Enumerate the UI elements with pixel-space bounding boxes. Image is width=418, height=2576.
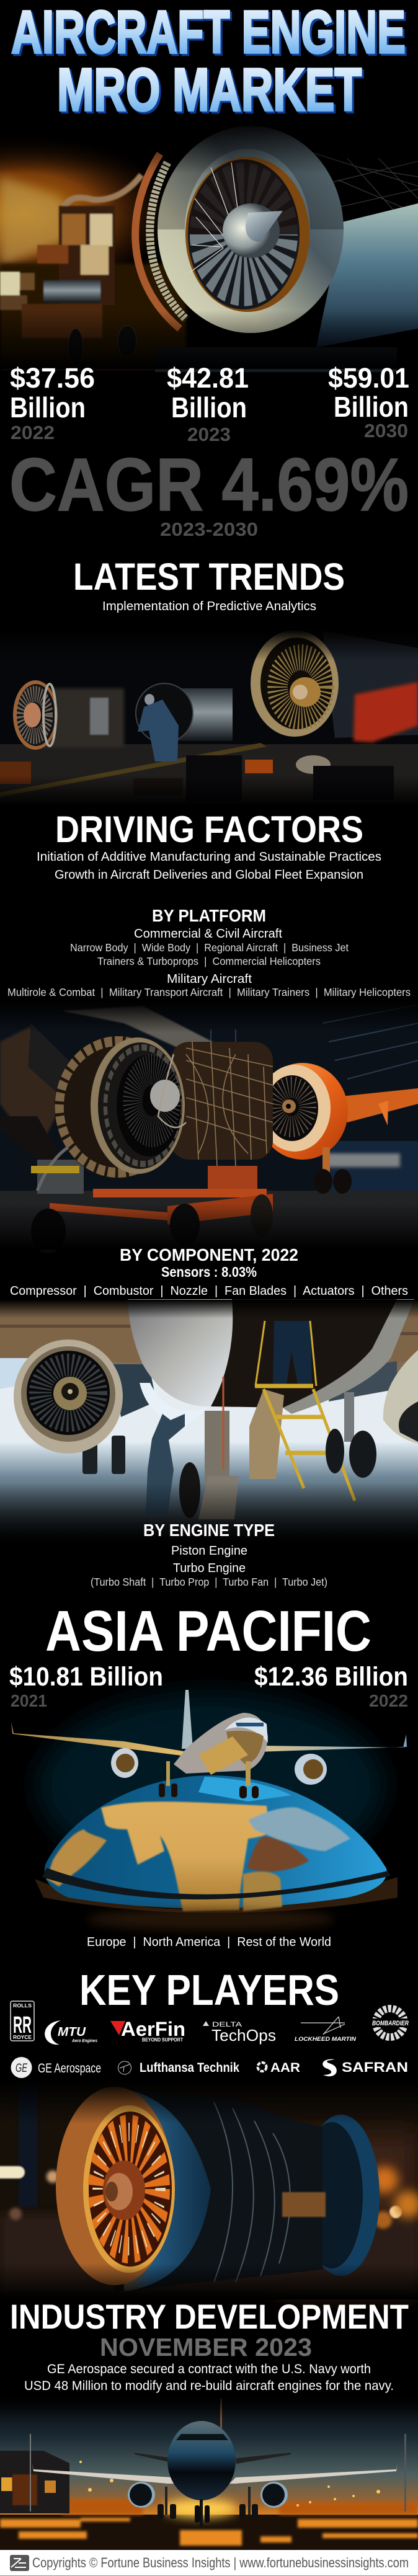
- market value 2023: $42.81: [167, 362, 249, 394]
- footer: [0, 2550, 418, 2576]
- market value 2023: 2023: [187, 424, 231, 445]
- by engine type segment: Turbo Engine: [173, 1561, 246, 1575]
- logo: GE Aerospace: GE Aerospace: [38, 2061, 101, 2076]
- development text: [24, 2362, 394, 2393]
- airplane: [32, 2398, 398, 2527]
- mechanic: [146, 1414, 185, 1516]
- heading: driving factors: DRIVING FACTORS: [55, 809, 363, 850]
- asia pacific values: 2022: [369, 1691, 408, 1710]
- asia pacific values: 2021: [11, 1691, 47, 1710]
- other regions: Europe | North America | Rest of the World: [87, 1935, 331, 1949]
- market value 2022: $37.56: [10, 362, 95, 394]
- CAGR: 2023-2030: [160, 518, 258, 540]
- logo: Delta TechOps: TechOps: [211, 2026, 276, 2045]
- right engine: [251, 630, 418, 742]
- by platform segment: Commercial & Civil Aircraft: [134, 927, 282, 941]
- heading: latest trends: LATEST TRENDS: [73, 556, 345, 598]
- logo: Rolls-Royce: ROLLS: [13, 2003, 32, 2009]
- by platform segment: Military Aircraft: [167, 972, 252, 986]
- logo: Lockheed Martin: [295, 2017, 357, 2043]
- logo: Delta TechOps: [203, 2021, 276, 2045]
- market value 2030: $59.01: [328, 362, 409, 394]
- image: glowing engine with bokeh: [0, 2081, 418, 2299]
- aircraft belly and cowl: [128, 1299, 414, 1426]
- logo: Rolls-Royce: RR: [13, 2012, 32, 2038]
- person on ladder: [273, 1321, 312, 1384]
- logo: Bombardier: BOMBARDIER: [372, 2020, 409, 2027]
- image: engine on stand in hangar: [0, 1002, 418, 1253]
- development text: USD 48 Million to modify and re-build aircraft engines for the navy.: [24, 2379, 394, 2393]
- by component segment: Compressor | Combustor | Nozzle | Fan Blades | Actuators | Others: [10, 1284, 408, 1298]
- title: [11, 0, 407, 125]
- market value 2030: 2030: [364, 420, 408, 442]
- logo: GE Aerospace: [11, 2057, 101, 2078]
- logo: AerFin: AerFin: [121, 2018, 185, 2040]
- by platform segment: Narrow Body | Wide Body | Regional Aircraft | Business Jet: [70, 941, 349, 954]
- driving factors text: Growth in Aircraft Deliveries and Global Fleet Expansion: [55, 868, 363, 882]
- tan cover: [249, 1389, 284, 1479]
- logo: Bombardier: [372, 2009, 409, 2037]
- market value 2030: [328, 362, 409, 442]
- image: engine workshop: [0, 629, 418, 806]
- logo: Safran: SAFRAN: [342, 2059, 408, 2075]
- by engine type segment: [91, 1521, 327, 1588]
- logo: Rolls-Royce: [11, 2001, 34, 2041]
- driving factors text: Initiation of Additive Manufacturing and Sustainable Practices: [37, 850, 381, 864]
- orange engine: [257, 1063, 418, 1194]
- image: globe and airplane: [11, 1690, 407, 1930]
- market value 2022: Billion: [10, 391, 86, 424]
- market value 2023: Billion: [171, 391, 247, 424]
- by component segment: Sensors : 8.03%: [161, 1264, 257, 1280]
- yellow ladder: [255, 1321, 355, 1501]
- asia pacific values: [9, 1662, 408, 1710]
- terminal building: [0, 2434, 406, 2513]
- logo: MTU: MTU: [58, 2025, 86, 2039]
- market value 2022: [10, 362, 95, 443]
- by engine type segment: Piston Engine: [171, 1544, 247, 1558]
- engine: [56, 2087, 380, 2291]
- footer logo: [10, 2555, 29, 2571]
- heading: key players: KEY PLAYERS: [79, 1966, 339, 2014]
- logo: Lockheed Martin: LOCKHEED MARTIN: [295, 2036, 357, 2043]
- by engine type segment: BY ENGINE TYPE: [143, 1521, 275, 1540]
- image: technicians under aircraft: [0, 1299, 418, 1544]
- logo: Rolls-Royce: ROYCE: [13, 2035, 32, 2040]
- logo: GE Aerospace: GE: [16, 2062, 27, 2075]
- image: airplane on wet runway at dusk: [0, 2394, 418, 2550]
- by platform segment: [7, 906, 411, 998]
- logo: MTU: [45, 2020, 97, 2045]
- worker: [138, 694, 179, 762]
- by component segment: BY COMPONENT, 2022: [120, 1245, 298, 1264]
- by engine type segment: (Turbo Shaft | Turbo Prop | Turbo Fan | Turbo Jet): [91, 1576, 327, 1588]
- logo: Lufthansa Technik: Lufthansa Technik: [140, 2061, 239, 2075]
- left engine: [14, 1339, 125, 1474]
- by platform segment: Trainers & Turboprops | Commercial Helicopters: [97, 955, 321, 967]
- bokeh lights: [0, 2166, 418, 2229]
- development date: NOVEMBER 2023: [100, 2333, 312, 2361]
- logo: AAR: AAR: [270, 2061, 300, 2075]
- logo: AAR: [258, 2061, 300, 2075]
- latest trends text: Implementation of Predictive Analytics: [102, 600, 316, 613]
- driving factors text: [37, 850, 381, 882]
- landing gear: [179, 1377, 239, 1519]
- development text: GE Aerospace secured a contract with the U.S. Navy worth: [47, 2362, 371, 2376]
- disassembled engine: [55, 1036, 273, 1178]
- asia pacific values: $10.81 Billion: [9, 1662, 163, 1692]
- left engine: [13, 680, 124, 750]
- hero image: jet engine: [0, 121, 418, 372]
- by component segment: [10, 1245, 408, 1298]
- logo: AerFin: BEYOND SUPPORT: [142, 2037, 183, 2043]
- globe: [35, 1775, 398, 1913]
- logo: Delta TechOps: DELTA: [212, 2021, 242, 2028]
- right gear and engine: [326, 1350, 418, 1478]
- logo: MTU: Aero Engines: [71, 2039, 97, 2043]
- airplane: [11, 1690, 407, 1798]
- heading: asia pacific: ASIA PACIFIC: [45, 1599, 371, 1663]
- market value 2023: [167, 362, 249, 445]
- market value 2022: 2022: [11, 422, 55, 443]
- middle engine: [136, 683, 233, 743]
- orange stand: [31, 1147, 273, 1253]
- by platform segment: BY PLATFORM: [152, 906, 266, 925]
- logo: Safran: [322, 2059, 408, 2076]
